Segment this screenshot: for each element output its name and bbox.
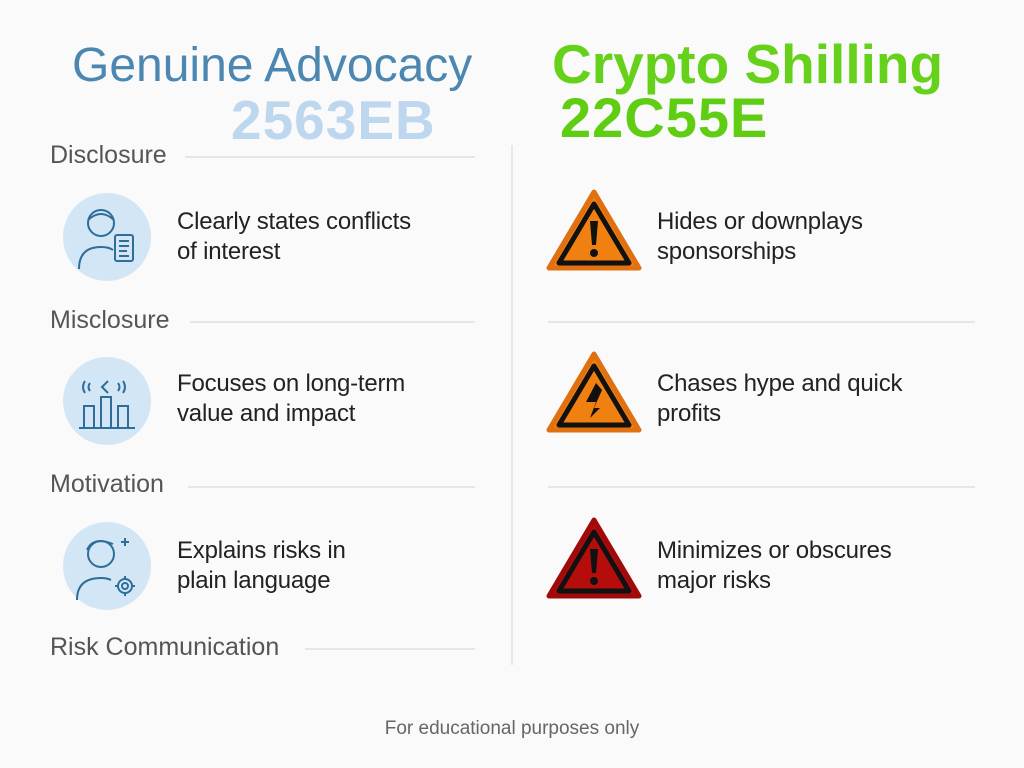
text: disclosure: [177, 208, 411, 265]
icon: red warning: [546, 518, 642, 598]
text: hides: [657, 208, 863, 265]
text: risks: Explains risks in: [177, 537, 346, 564]
text: disclosure: of interest: [177, 238, 280, 265]
label: Motivation: Motivation: [50, 470, 164, 498]
icon: person with document: [63, 193, 151, 281]
text: hype: profits: [657, 400, 721, 427]
label: Disclosure: Disclosure: [50, 141, 167, 169]
icon: person with gear: [63, 522, 151, 610]
icon: orange warning: [546, 190, 642, 270]
text: hides: sponsorships: [657, 238, 796, 265]
text: value: [177, 370, 405, 427]
footer: For educational purposes only: [385, 718, 639, 739]
icon: bar chart with signals: [63, 357, 151, 445]
text: minimizes: Minimizes or obscures: [657, 537, 892, 564]
text: hides: Hides or downplays: [657, 208, 863, 235]
text: hype: Chases hype and quick: [657, 370, 902, 397]
title: Crypto Shilling: Crypto Shilling: [552, 33, 943, 95]
divider: [511, 145, 513, 665]
text: hype: [657, 370, 902, 427]
text: value: Focuses on long-term: [177, 370, 405, 397]
text: risks: plain language: [177, 567, 330, 594]
text: minimizes: [657, 537, 892, 594]
text: value: value and impact: [177, 400, 355, 427]
subtitle: 22C55E: 22C55E: [560, 86, 768, 149]
title: Genuine Advocacy: Genuine Advocacy: [72, 39, 472, 92]
icon: orange lightning: [546, 352, 642, 432]
text: risks: [177, 537, 346, 594]
text: minimizes: major risks: [657, 567, 771, 594]
label: Misclosure: Misclosure: [50, 306, 169, 334]
subtitle: 2563EB: 2563EB: [231, 89, 436, 151]
label: Risk Communication: Risk Communication: [50, 633, 279, 661]
text: disclosure: Clearly states conflicts: [177, 208, 411, 235]
